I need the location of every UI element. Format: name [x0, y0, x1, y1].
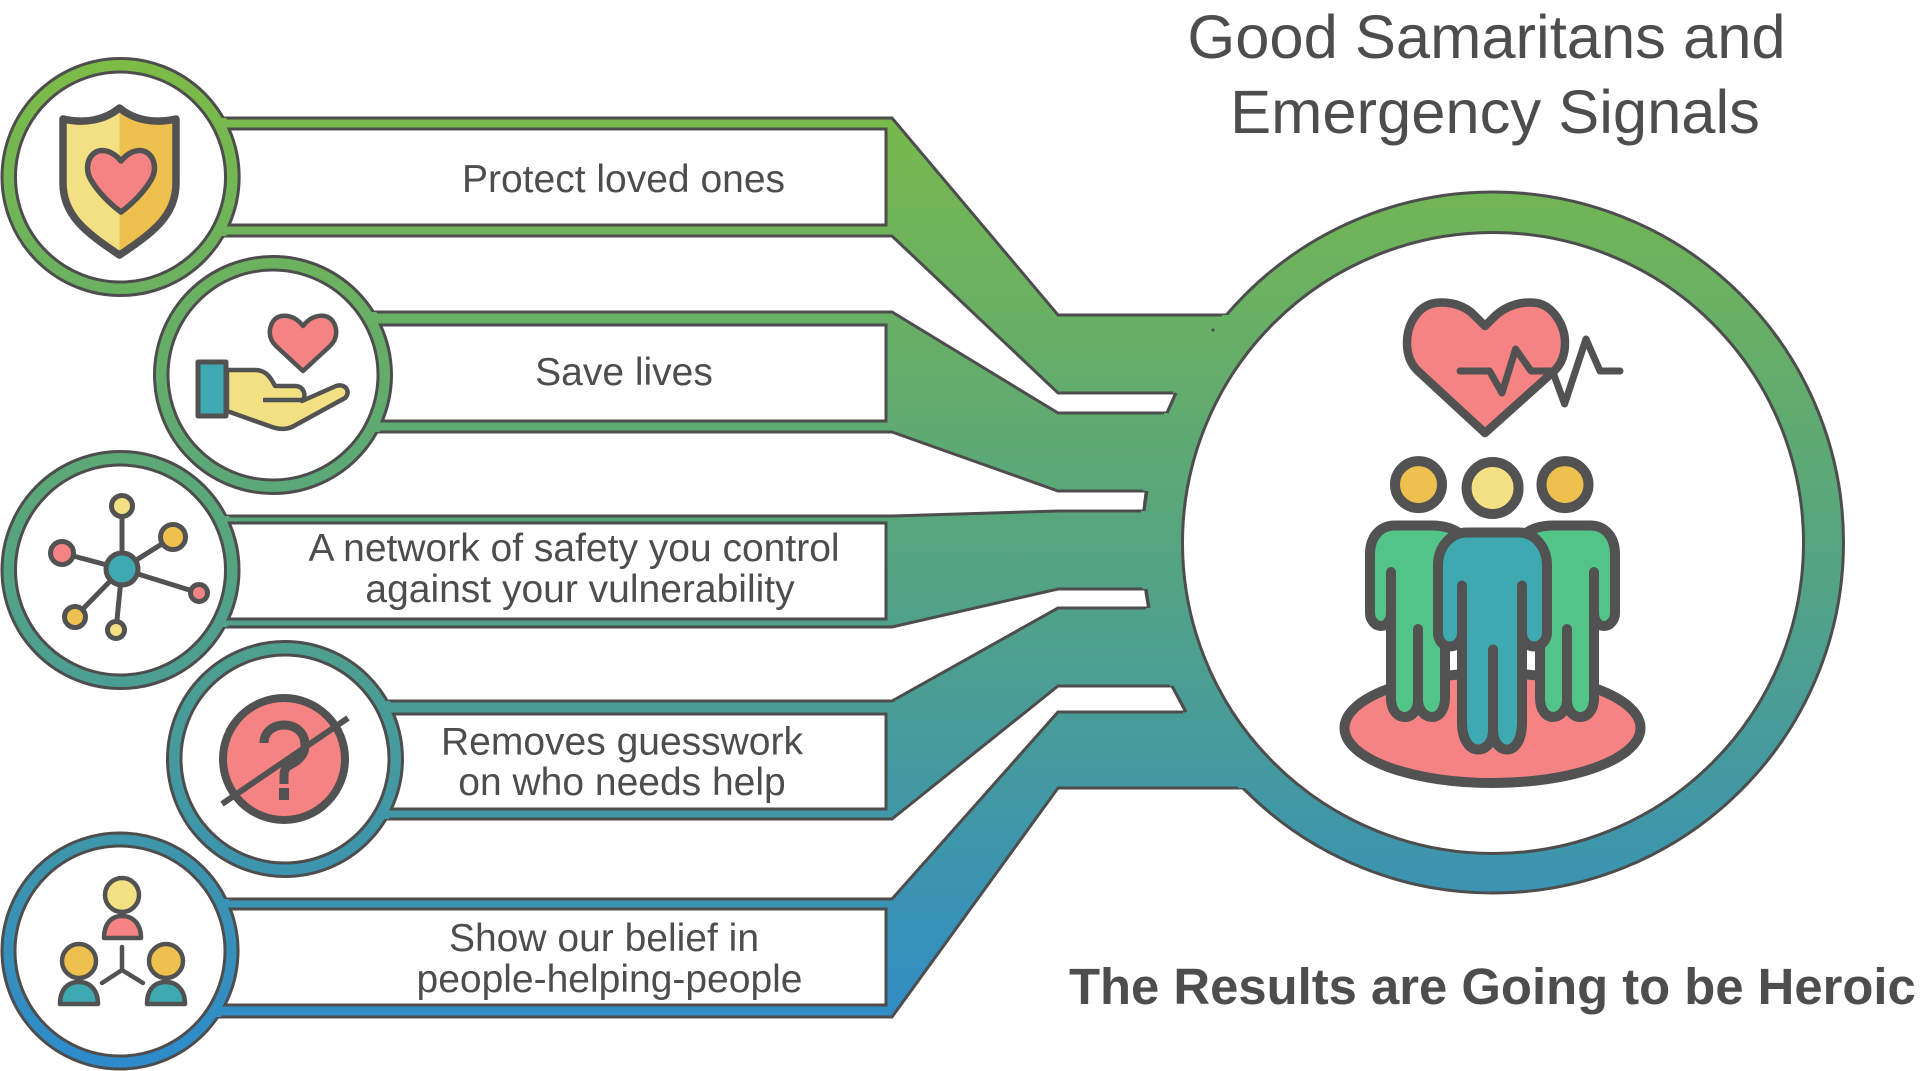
label box	[391, 714, 886, 809]
icon ring	[15, 846, 225, 1056]
item: save lives	[168, 270, 886, 480]
item: removes guesswork	[181, 655, 886, 863]
icon ring	[16, 465, 226, 675]
item: network of safety	[16, 465, 886, 675]
connector bands	[120, 118, 1260, 1017]
main circle interior	[1182, 232, 1804, 854]
icon: hand holding heart	[198, 316, 348, 429]
item: removes guesswork: on who needs help	[458, 761, 786, 804]
main circle with people and heart	[1182, 232, 1804, 854]
item: belief in people: people-helping-people	[417, 958, 802, 1001]
label box	[225, 909, 886, 1005]
icon: crossed out question mark	[222, 698, 348, 820]
label box	[229, 129, 886, 225]
label box	[228, 523, 886, 619]
label text: A network of safety you control	[308, 527, 840, 570]
label text: Protect loved ones	[462, 158, 785, 201]
title: Emergency Signals	[1230, 78, 1760, 147]
label box	[380, 325, 886, 421]
icon: network nodes	[50, 496, 208, 638]
title: Good Samaritans and	[1187, 3, 1786, 72]
item: protect loved ones	[16, 72, 886, 282]
icon: three connected people	[60, 878, 185, 1004]
icon ring	[16, 72, 226, 282]
bottom tagline: The Results are Going to be Heroic	[1069, 958, 1916, 1015]
icon ring	[168, 270, 378, 480]
icon: shield with heart	[63, 108, 176, 255]
icon: heart with pulse	[1407, 303, 1620, 433]
icon ring	[181, 655, 389, 863]
icon: three people on a platform	[1344, 461, 1640, 783]
item: network of safety: against your vulnerability	[365, 568, 795, 611]
label text: Removes guesswork	[441, 720, 803, 764]
label text: Show our belief in	[449, 917, 759, 960]
item: belief in people	[15, 846, 886, 1056]
title	[1187, 3, 1786, 147]
label text: Save lives	[535, 351, 713, 394]
